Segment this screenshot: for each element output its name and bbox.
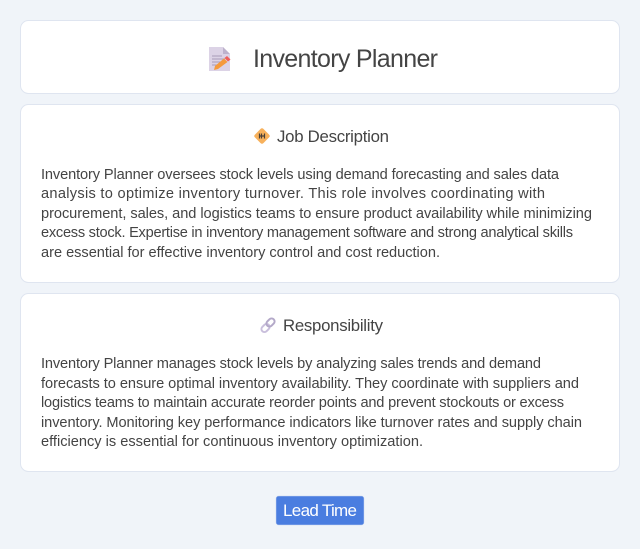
icon: construction diamond: [254, 128, 270, 144]
text block: job description: excess stock. Expertise in inventory management software and strong analytical skills: [41, 225, 573, 241]
heading: Inventory Planner: Inventory Planner: [253, 45, 438, 73]
text block: responsibility: Inventory Planner manages stock levels by analyzing sales trends and demand: [41, 356, 541, 372]
panel: title: [20, 20, 620, 94]
button: Lead Time: Lead Time: [283, 501, 357, 520]
text block: responsibility: logistics teams to maintain accurate reorder points and prevent stockouts or excess: [41, 395, 564, 411]
text block: job description: are essential for effective inventory control and cost reduction.: [41, 245, 440, 261]
text block: responsibility: efficiency is essential for continuous inventory optimization.: [41, 434, 423, 450]
panel: job description: [20, 104, 620, 282]
text block: job description: [41, 167, 592, 261]
text block: responsibility: [41, 356, 582, 450]
heading: Responsibility: Responsibility: [283, 316, 384, 335]
heading: Job Description: Job Description: [277, 127, 389, 146]
button: Lead Time: [276, 496, 364, 525]
text block: responsibility: forecasts to ensure optimal inventory availability. They coordinate with suppliers and: [41, 376, 579, 392]
text block: responsibility: inventory. Monitoring key performance indicators like turnover rates and supply chain: [41, 415, 582, 431]
panel: responsibility: [20, 294, 620, 472]
icon: document with pencil: [209, 47, 230, 71]
text block: job description: Inventory Planner oversees stock levels using demand forecasting and sales data: [41, 167, 560, 183]
text block: job description: analysis to optimize inventory turnover. This role involves coordinating with: [41, 186, 545, 202]
icon: chain link: [260, 317, 276, 333]
text block: job description: procurement, sales, and logistics teams to ensure product availability while minimizing: [41, 206, 592, 222]
